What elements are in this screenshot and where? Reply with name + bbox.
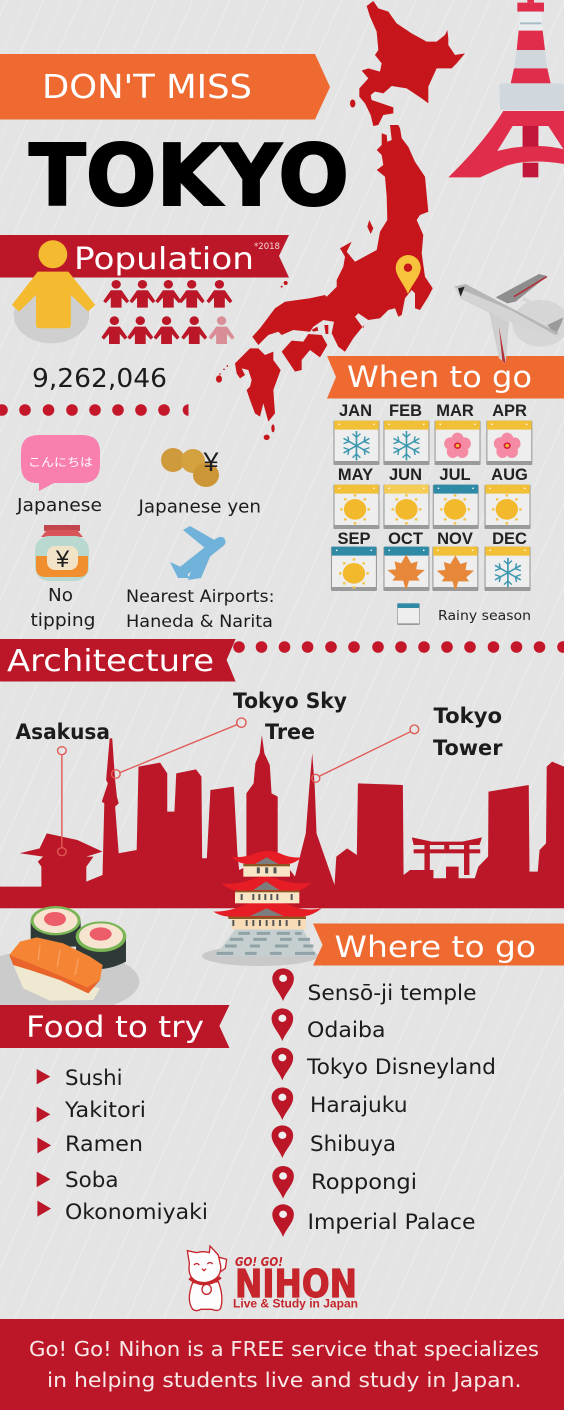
- heading: Where to go: Where to go: [334, 930, 536, 964]
- divider dots: top: [0, 404, 189, 416]
- icon: speech bubble: [21, 435, 100, 491]
- banner: Food to try: [0, 1005, 230, 1048]
- heading: Don't Miss: DON'T MISS: [42, 67, 252, 106]
- label: Tokyo Sky Tree: Tree: [265, 720, 315, 744]
- illustration: sushi: [0, 906, 139, 1014]
- list: where to go: Harajuku: [310, 1093, 408, 1117]
- calendar: month labels: JAN: [339, 402, 372, 420]
- text: airports: Haneda & Narita: [126, 612, 273, 632]
- banner: Architecture: [0, 639, 236, 682]
- divider dots: architecture: [233, 641, 564, 653]
- list: food to try: [64, 1066, 208, 1224]
- banner: Population: [0, 235, 289, 278]
- icon: large person: [12, 240, 95, 343]
- icon: tip jar: [35, 525, 89, 581]
- label: Tokyo Sky Tree: [233, 689, 347, 744]
- icon: lucky cat: [187, 1246, 227, 1311]
- icon: speech bubble: こんにちは: [28, 455, 93, 469]
- footer: [0, 1319, 564, 1410]
- calendar: monthly icons: [331, 421, 532, 591]
- calendar: month labels: NOV: [437, 530, 473, 548]
- logo: Go! Go! Nihon: GO! GO!: [235, 1255, 283, 1269]
- heading: Food to try: Food to try: [26, 1010, 204, 1044]
- logo: Go! Go! Nihon: [187, 1246, 358, 1311]
- text: footer message: Go! Go! Nihon is a FREE service that specializes: [29, 1337, 539, 1361]
- icon: airplane: [454, 274, 564, 363]
- calendar: month labels: MAR: [436, 402, 474, 420]
- calendar: month labels: AUG: [491, 466, 528, 484]
- icon: yen coins: [161, 447, 219, 487]
- list: food bullets: [37, 1069, 51, 1217]
- text: tipping: No: [48, 586, 73, 606]
- legend: rainy season: Rainy season: [438, 608, 531, 624]
- calendar: month labels: MAY: [338, 466, 373, 484]
- list: where to go: Sensō-ji temple: [308, 981, 476, 1005]
- text: currency: Japanese yen: [137, 498, 261, 518]
- text: airports: Nearest Airports:: [126, 587, 274, 607]
- list: food to try: Sushi: [65, 1066, 122, 1090]
- calendar: month labels: FEB: [389, 402, 422, 420]
- skyline silhouette: [0, 735, 564, 908]
- list: food to try: Okonomiyaki: [65, 1200, 208, 1224]
- text: footer message: [29, 1337, 539, 1392]
- list: where to go: Roppongi: [311, 1170, 417, 1194]
- heading: When to go: When to go: [347, 360, 532, 394]
- title: Tokyo: TOKYO: [29, 127, 349, 226]
- label: Tokyo Tower: [433, 704, 503, 760]
- icon: tip jar: ¥: [55, 546, 70, 573]
- text: language: Japanese: [16, 496, 102, 516]
- logo: Go! Go! Nihon: Live & Study in Japan: [233, 1296, 358, 1310]
- list: location pins: [272, 968, 294, 1237]
- list: food to try: Yakitori: [64, 1098, 146, 1122]
- icon: Tokyo tower: [448, 0, 564, 177]
- logo: Go! Go! Nihon: NIHON: [235, 1262, 357, 1306]
- banner: When to go: [327, 356, 564, 398]
- icon: yen coins: ¥: [202, 447, 219, 477]
- note: 2018: *2018: [254, 242, 280, 252]
- banner: Don't Miss: [0, 54, 330, 120]
- heading: Population: Population: [74, 242, 254, 277]
- text: tipping: [30, 586, 96, 631]
- text: population figure: 9,262,046: [32, 364, 167, 394]
- icon: Tokyo location pin: [396, 255, 421, 294]
- calendar: month labels: JUL: [439, 466, 471, 484]
- calendar: month labels: JUN: [389, 466, 422, 484]
- banner: Where to go: [202, 924, 564, 966]
- heading: Architecture: Architecture: [7, 644, 214, 679]
- text: footer message: in helping students live and study in Japan.: [47, 1368, 522, 1392]
- label: Tokyo Sky Tree: Tokyo Sky: [233, 689, 347, 713]
- calendar: month labels: DEC: [492, 530, 527, 548]
- calendar: month labels: SEP: [337, 530, 371, 548]
- list: where to go: Odaiba: [307, 1018, 386, 1042]
- label: Asakusa: Asakusa: [16, 720, 110, 744]
- text: airports: [126, 587, 274, 632]
- list: where to go: Shibuya: [310, 1132, 396, 1156]
- text: tipping: tipping: [30, 611, 96, 631]
- list: where to go: Imperial Palace: [308, 1210, 476, 1234]
- calendar: month labels: [337, 402, 528, 548]
- map of Japan: [216, 1, 465, 440]
- list: food to try: Soba: [65, 1168, 118, 1192]
- list: where to go: [306, 981, 496, 1234]
- legend: rainy season: [397, 603, 531, 625]
- callout lines: [58, 718, 419, 856]
- calendar: month labels: OCT: [388, 530, 423, 548]
- list: where to go: Tokyo Disneyland: [306, 1055, 496, 1079]
- label: Tokyo Tower: Tokyo: [434, 704, 502, 728]
- label: Tokyo Tower: Tower: [433, 736, 503, 760]
- chart: population pictogram: [101, 280, 235, 344]
- icon: castle: [213, 851, 322, 957]
- calendar: month labels: APR: [492, 402, 527, 420]
- list: food to try: Ramen: [65, 1132, 143, 1156]
- icon: blue airplane: [170, 526, 226, 580]
